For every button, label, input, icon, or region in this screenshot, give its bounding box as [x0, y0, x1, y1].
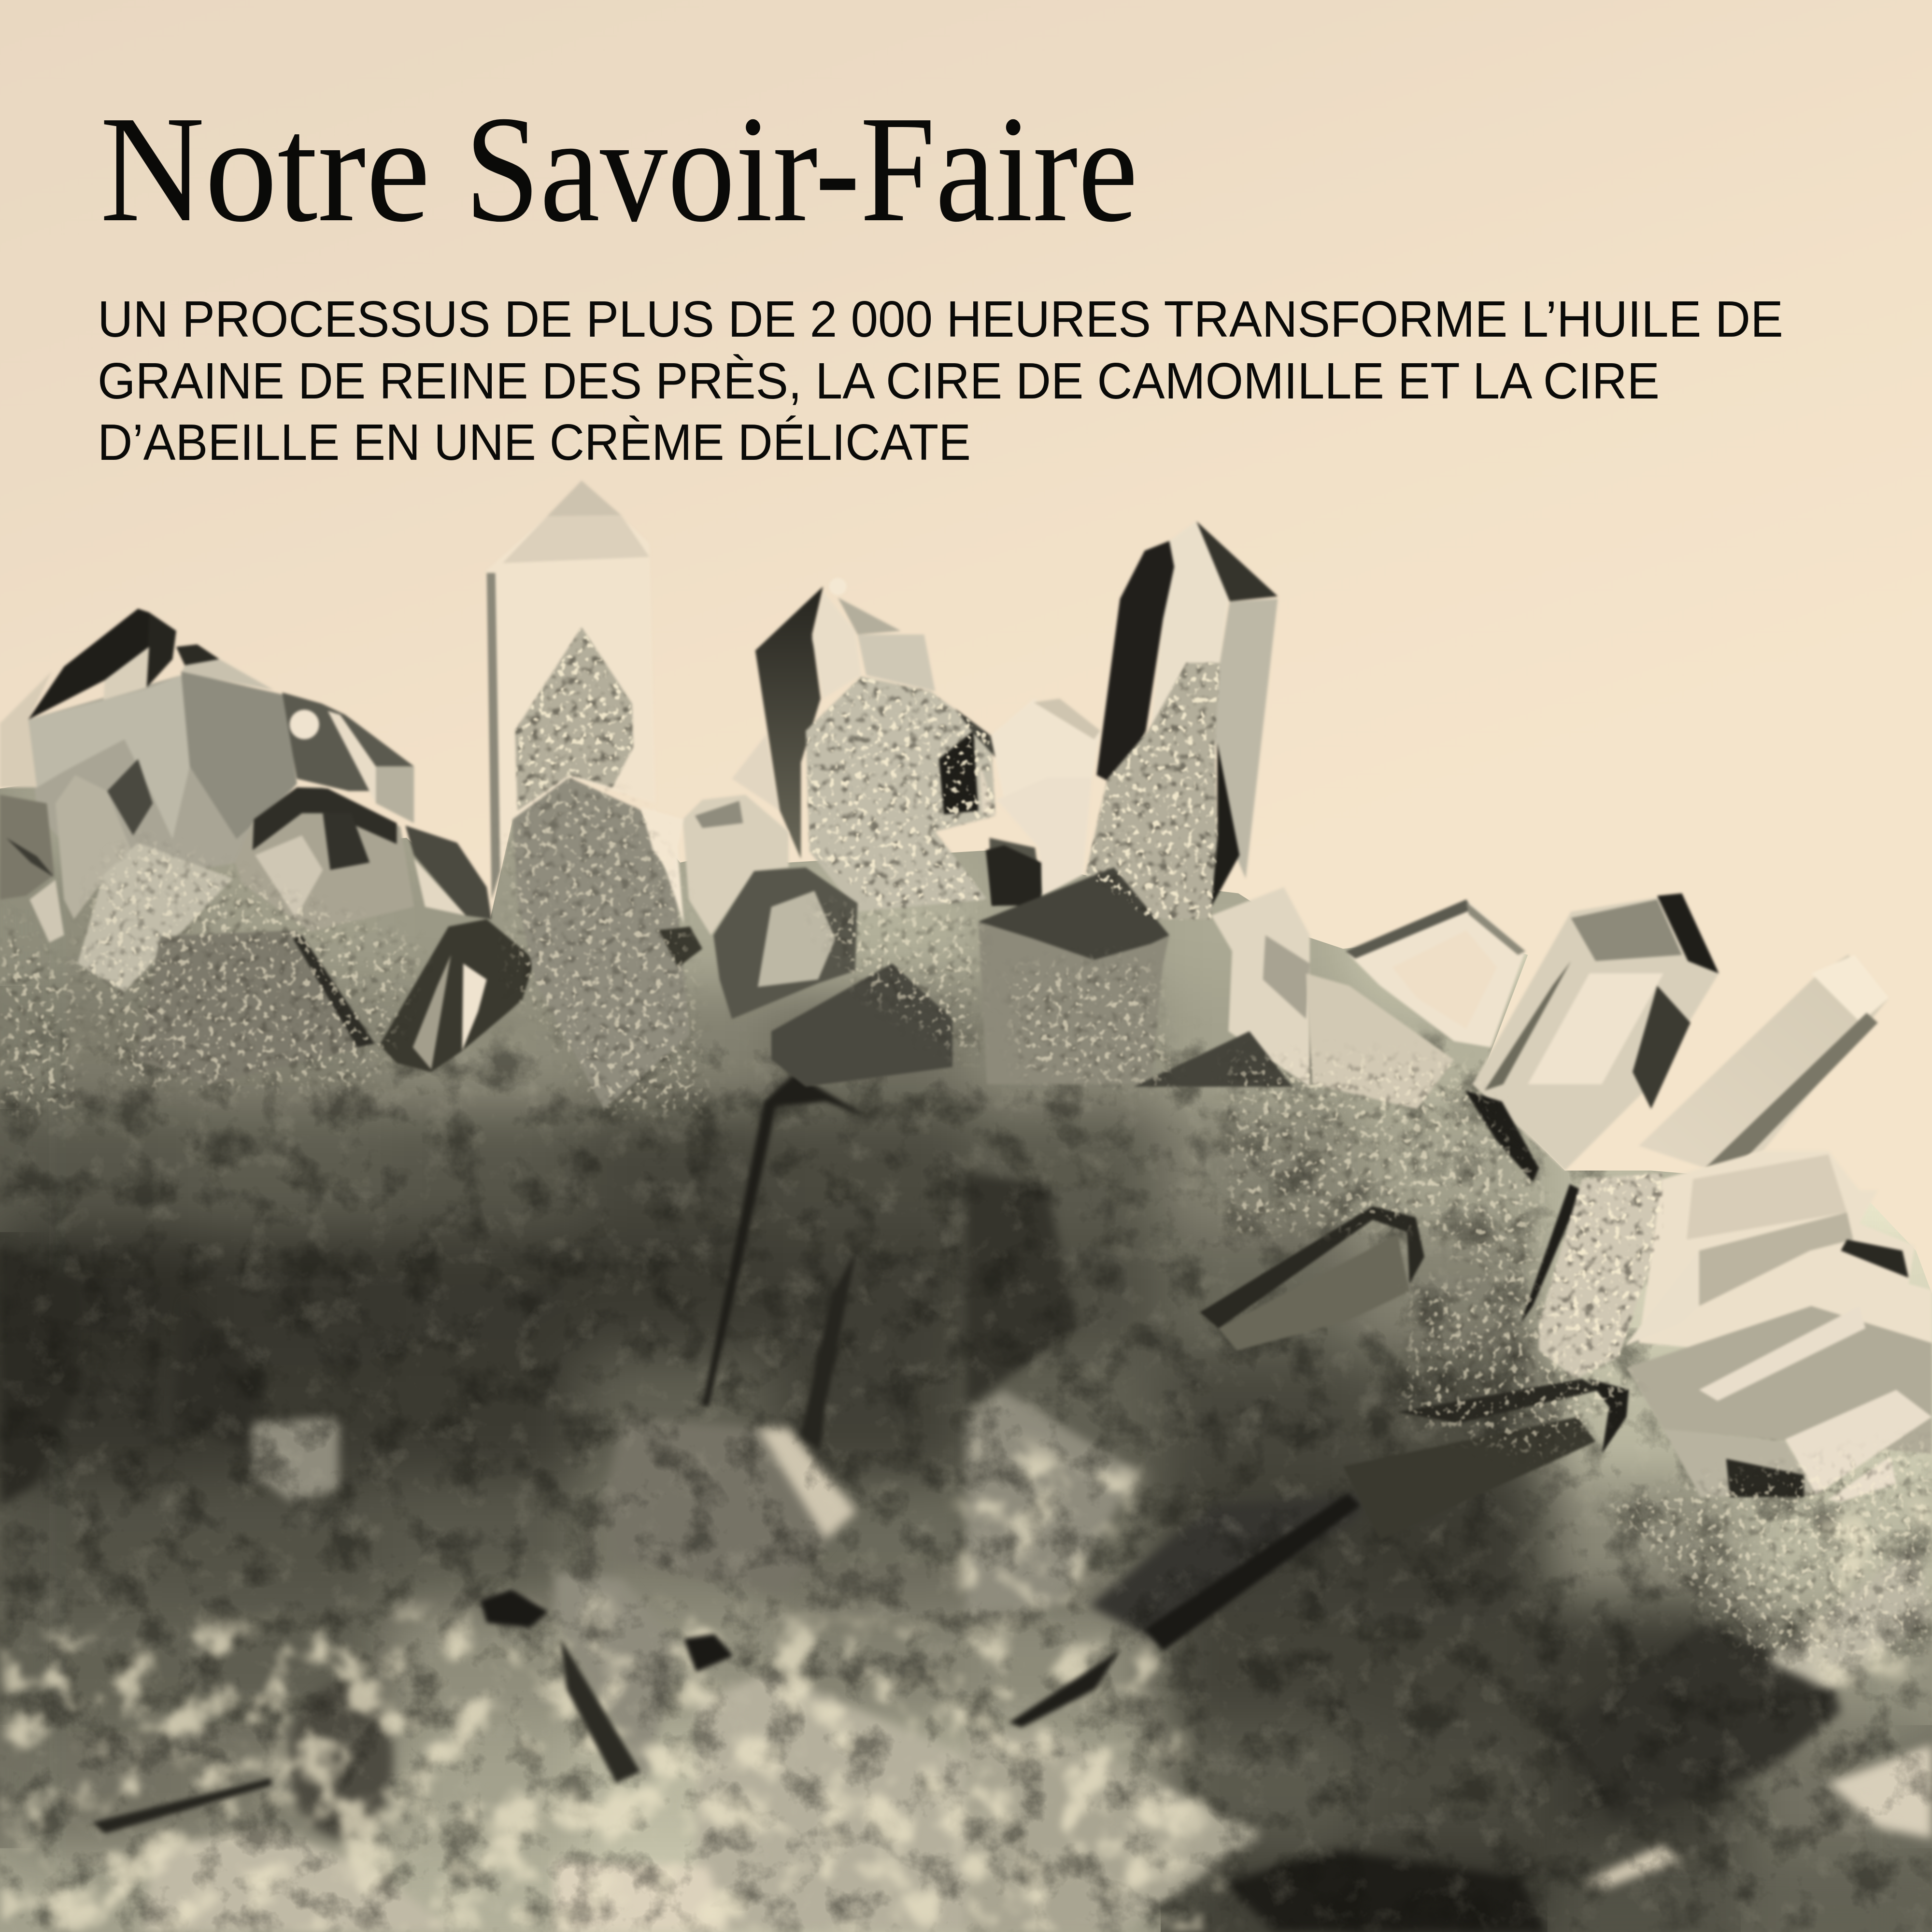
crystal: tall right column	[1085, 521, 1278, 919]
subtitle text: GRAINE DE REINE DES PRÈS, LA CIRE DE CAMOMILLE ET LA CIRE	[98, 353, 1660, 410]
title	[100, 85, 1138, 254]
crystal: slanted rod	[1639, 955, 1889, 1168]
subtitle text: UN PROCESSUS DE PLUS DE 2 000 HEURES TRANSFORME L’HUILE DE	[98, 291, 1783, 348]
title: Notre	[100, 85, 430, 254]
title: Savoir-Faire	[465, 85, 1138, 254]
crystal: small centre crystals and dark blocks	[641, 795, 1310, 1087]
subtitle text	[98, 291, 1783, 471]
crystal: lower right bright spray	[1200, 1091, 1932, 1540]
subtitle text: D’ABEILLE EN UNE CRÈME DÉLICATE	[98, 414, 971, 471]
photo: quartz crystal cluster	[0, 481, 1932, 1932]
crystal: right hollow crystals	[1306, 893, 1719, 1170]
crystal: left middle	[136, 787, 535, 1084]
crystal: left cap	[0, 609, 414, 992]
dark shards in the lower cluster	[92, 1073, 1360, 1833]
crystal: centre cap with speckled core	[732, 578, 1100, 912]
blurred foreground facets and shadows	[0, 1173, 1932, 1932]
tonal mass of the cluster body	[0, 739, 1932, 1932]
crystal: tall pale column	[487, 481, 690, 1109]
